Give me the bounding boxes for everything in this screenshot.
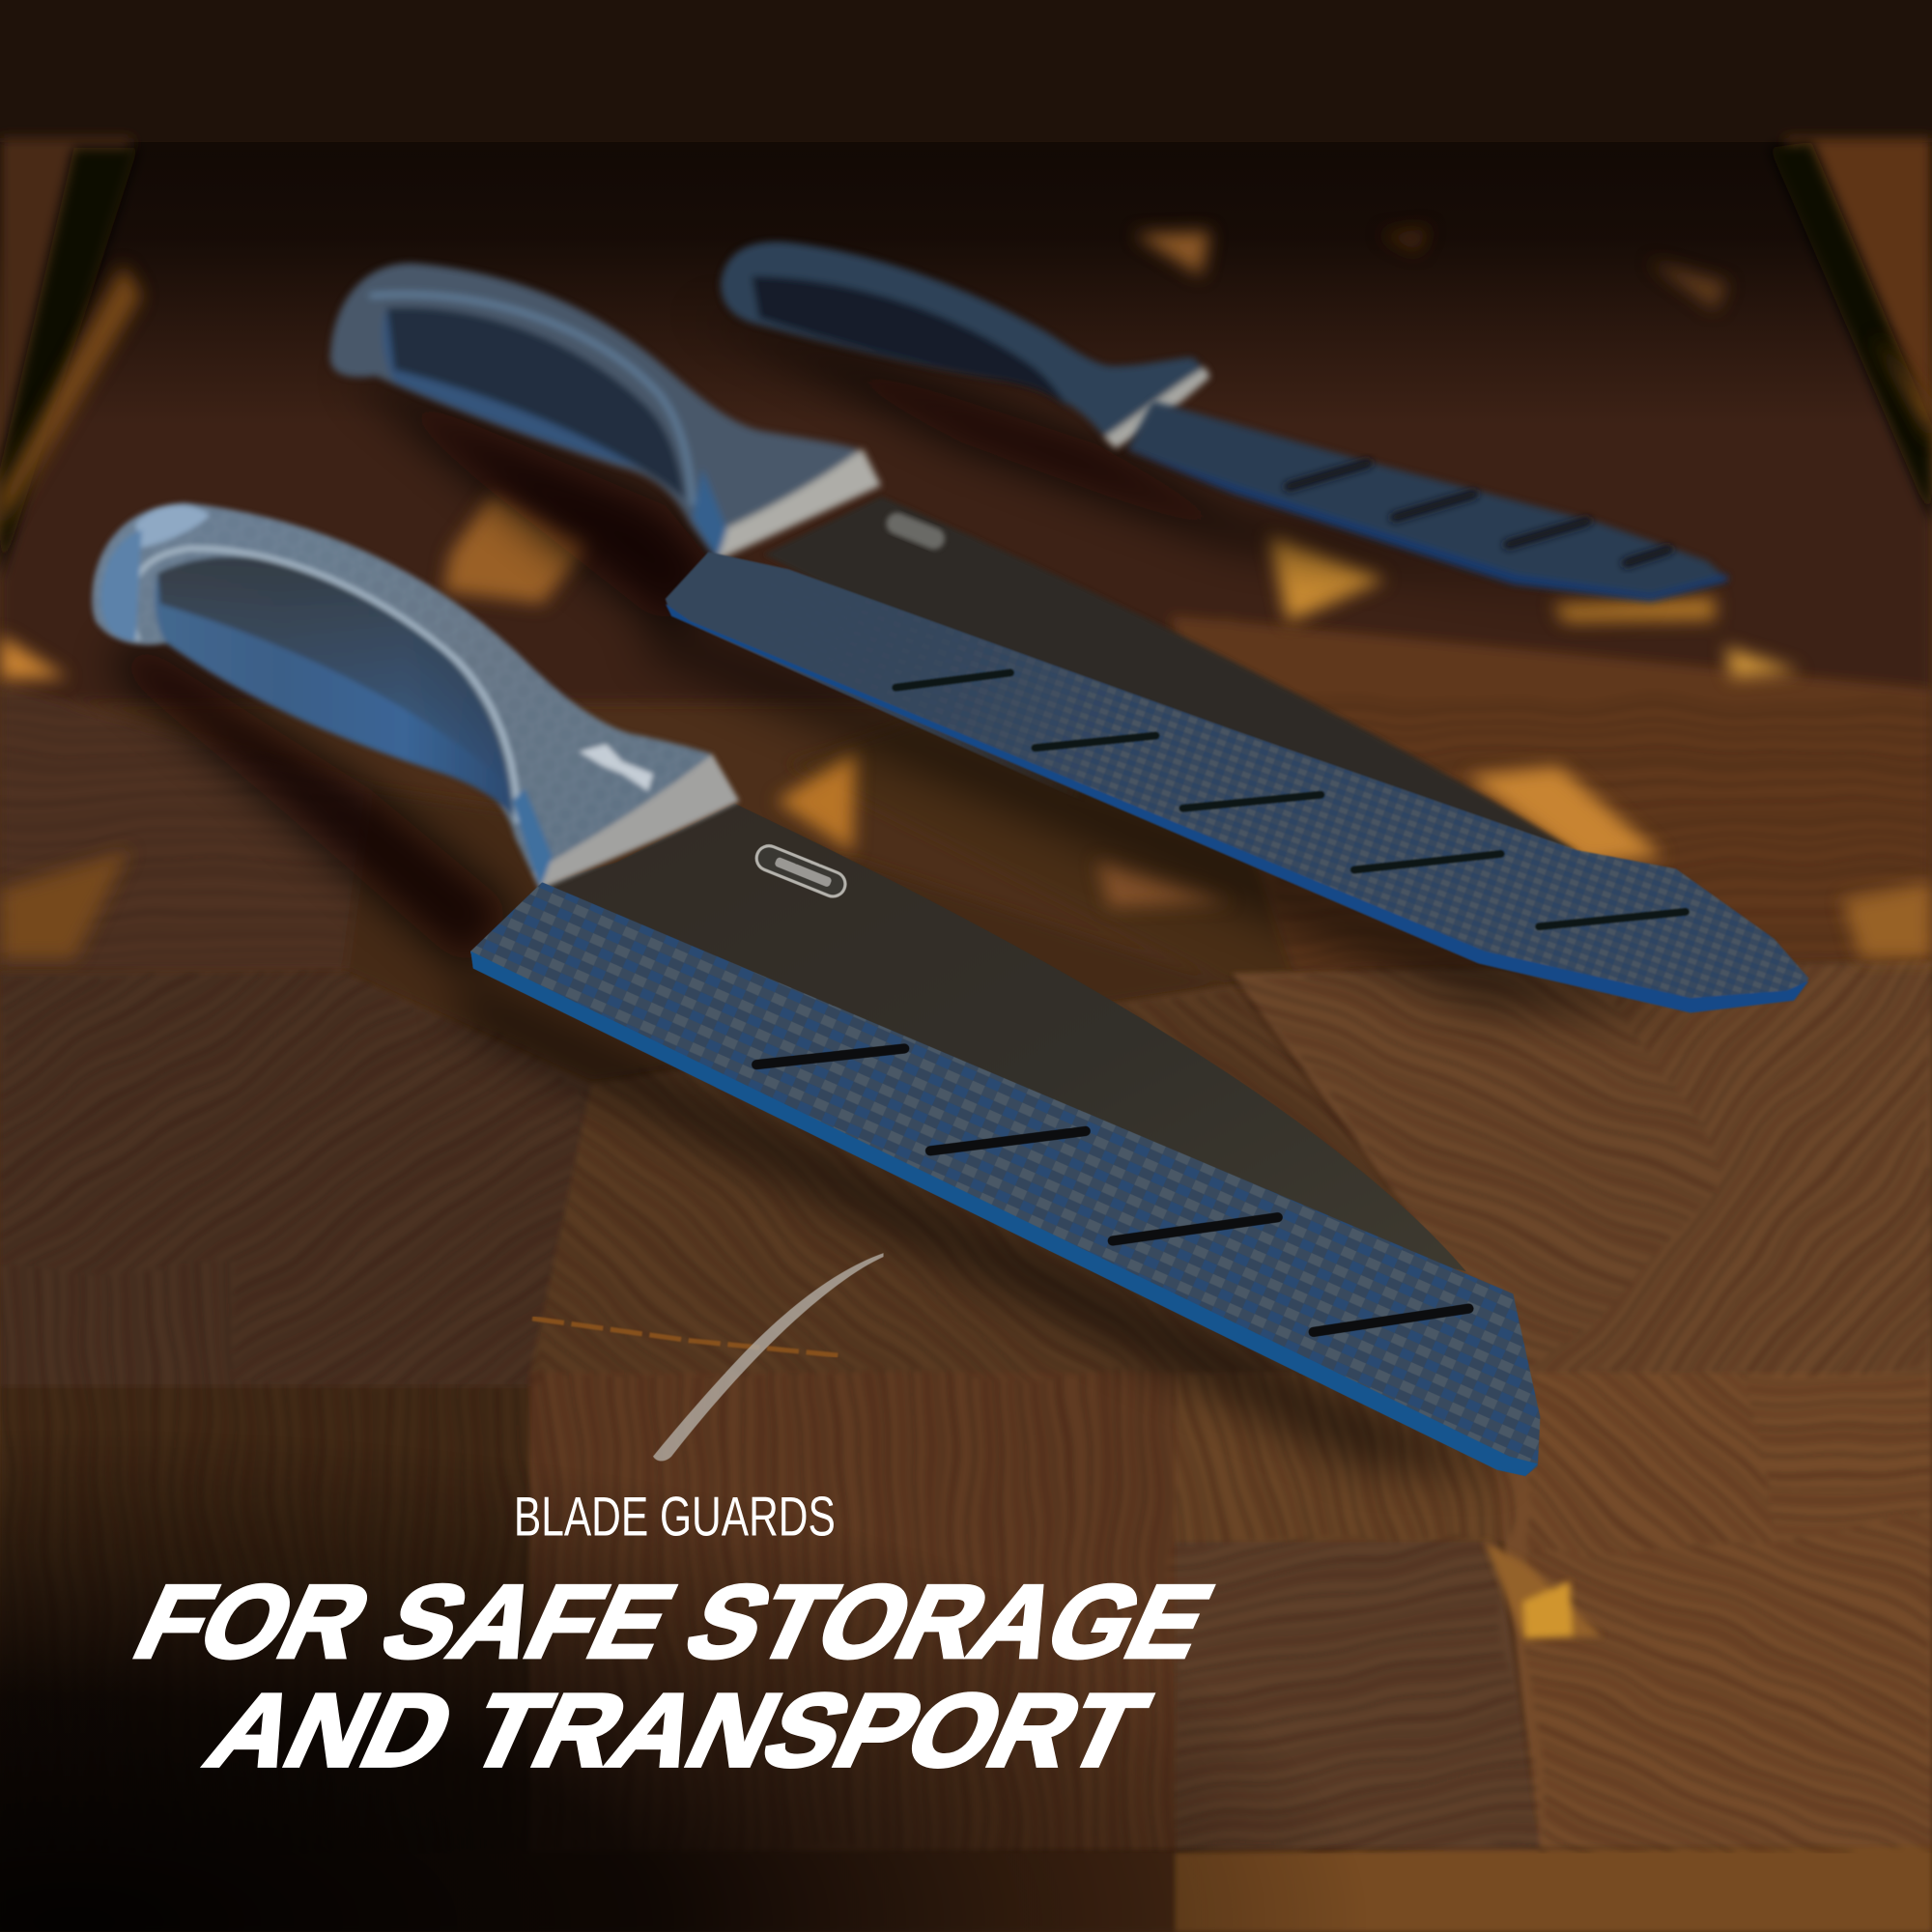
- knife: back: [721, 242, 1727, 601]
- middle knife blade: [764, 497, 1579, 853]
- front knife handle: [92, 502, 739, 890]
- back knife slots: [1289, 464, 1668, 563]
- front knife logo badge: [753, 842, 849, 900]
- headline line 2: AND TRANSPORT: [191, 1672, 1164, 1788]
- knife: middle: [330, 264, 1808, 1012]
- knife: front: [92, 502, 1540, 1476]
- middle knife blade guard: [666, 552, 1808, 1012]
- middle knife slots: [895, 672, 1686, 926]
- dark board edge: [0, 142, 1932, 579]
- callout label: BLADE GUARDS: [514, 1486, 836, 1548]
- knife shadows: [111, 308, 1688, 1472]
- front knife slots: [756, 1048, 1468, 1332]
- middle knife logo: [883, 509, 949, 553]
- back knife handle: [721, 242, 1210, 448]
- amber end grain highlights: [0, 228, 1932, 958]
- board blocks: [0, 148, 1932, 1084]
- bottom left vignette: [0, 1417, 1932, 1932]
- middle knife handle: [330, 264, 881, 560]
- board side margins: [0, 138, 1932, 536]
- amber glow near bottom right: [1484, 1540, 1602, 1638]
- counter surface behind the board: [0, 0, 1932, 142]
- headline line 1: FOR SAFE STORAGE: [118, 1563, 1230, 1679]
- headline: [118, 1563, 1230, 1788]
- wood grain: [0, 684, 1932, 1853]
- callout pointer line: [653, 1253, 884, 1461]
- board top shadow: [0, 142, 1932, 425]
- front knife blade guard: [470, 882, 1540, 1476]
- burn mark: [532, 1319, 838, 1355]
- front knife blade: [542, 804, 1466, 1271]
- back knife blade guard: [1125, 401, 1727, 601]
